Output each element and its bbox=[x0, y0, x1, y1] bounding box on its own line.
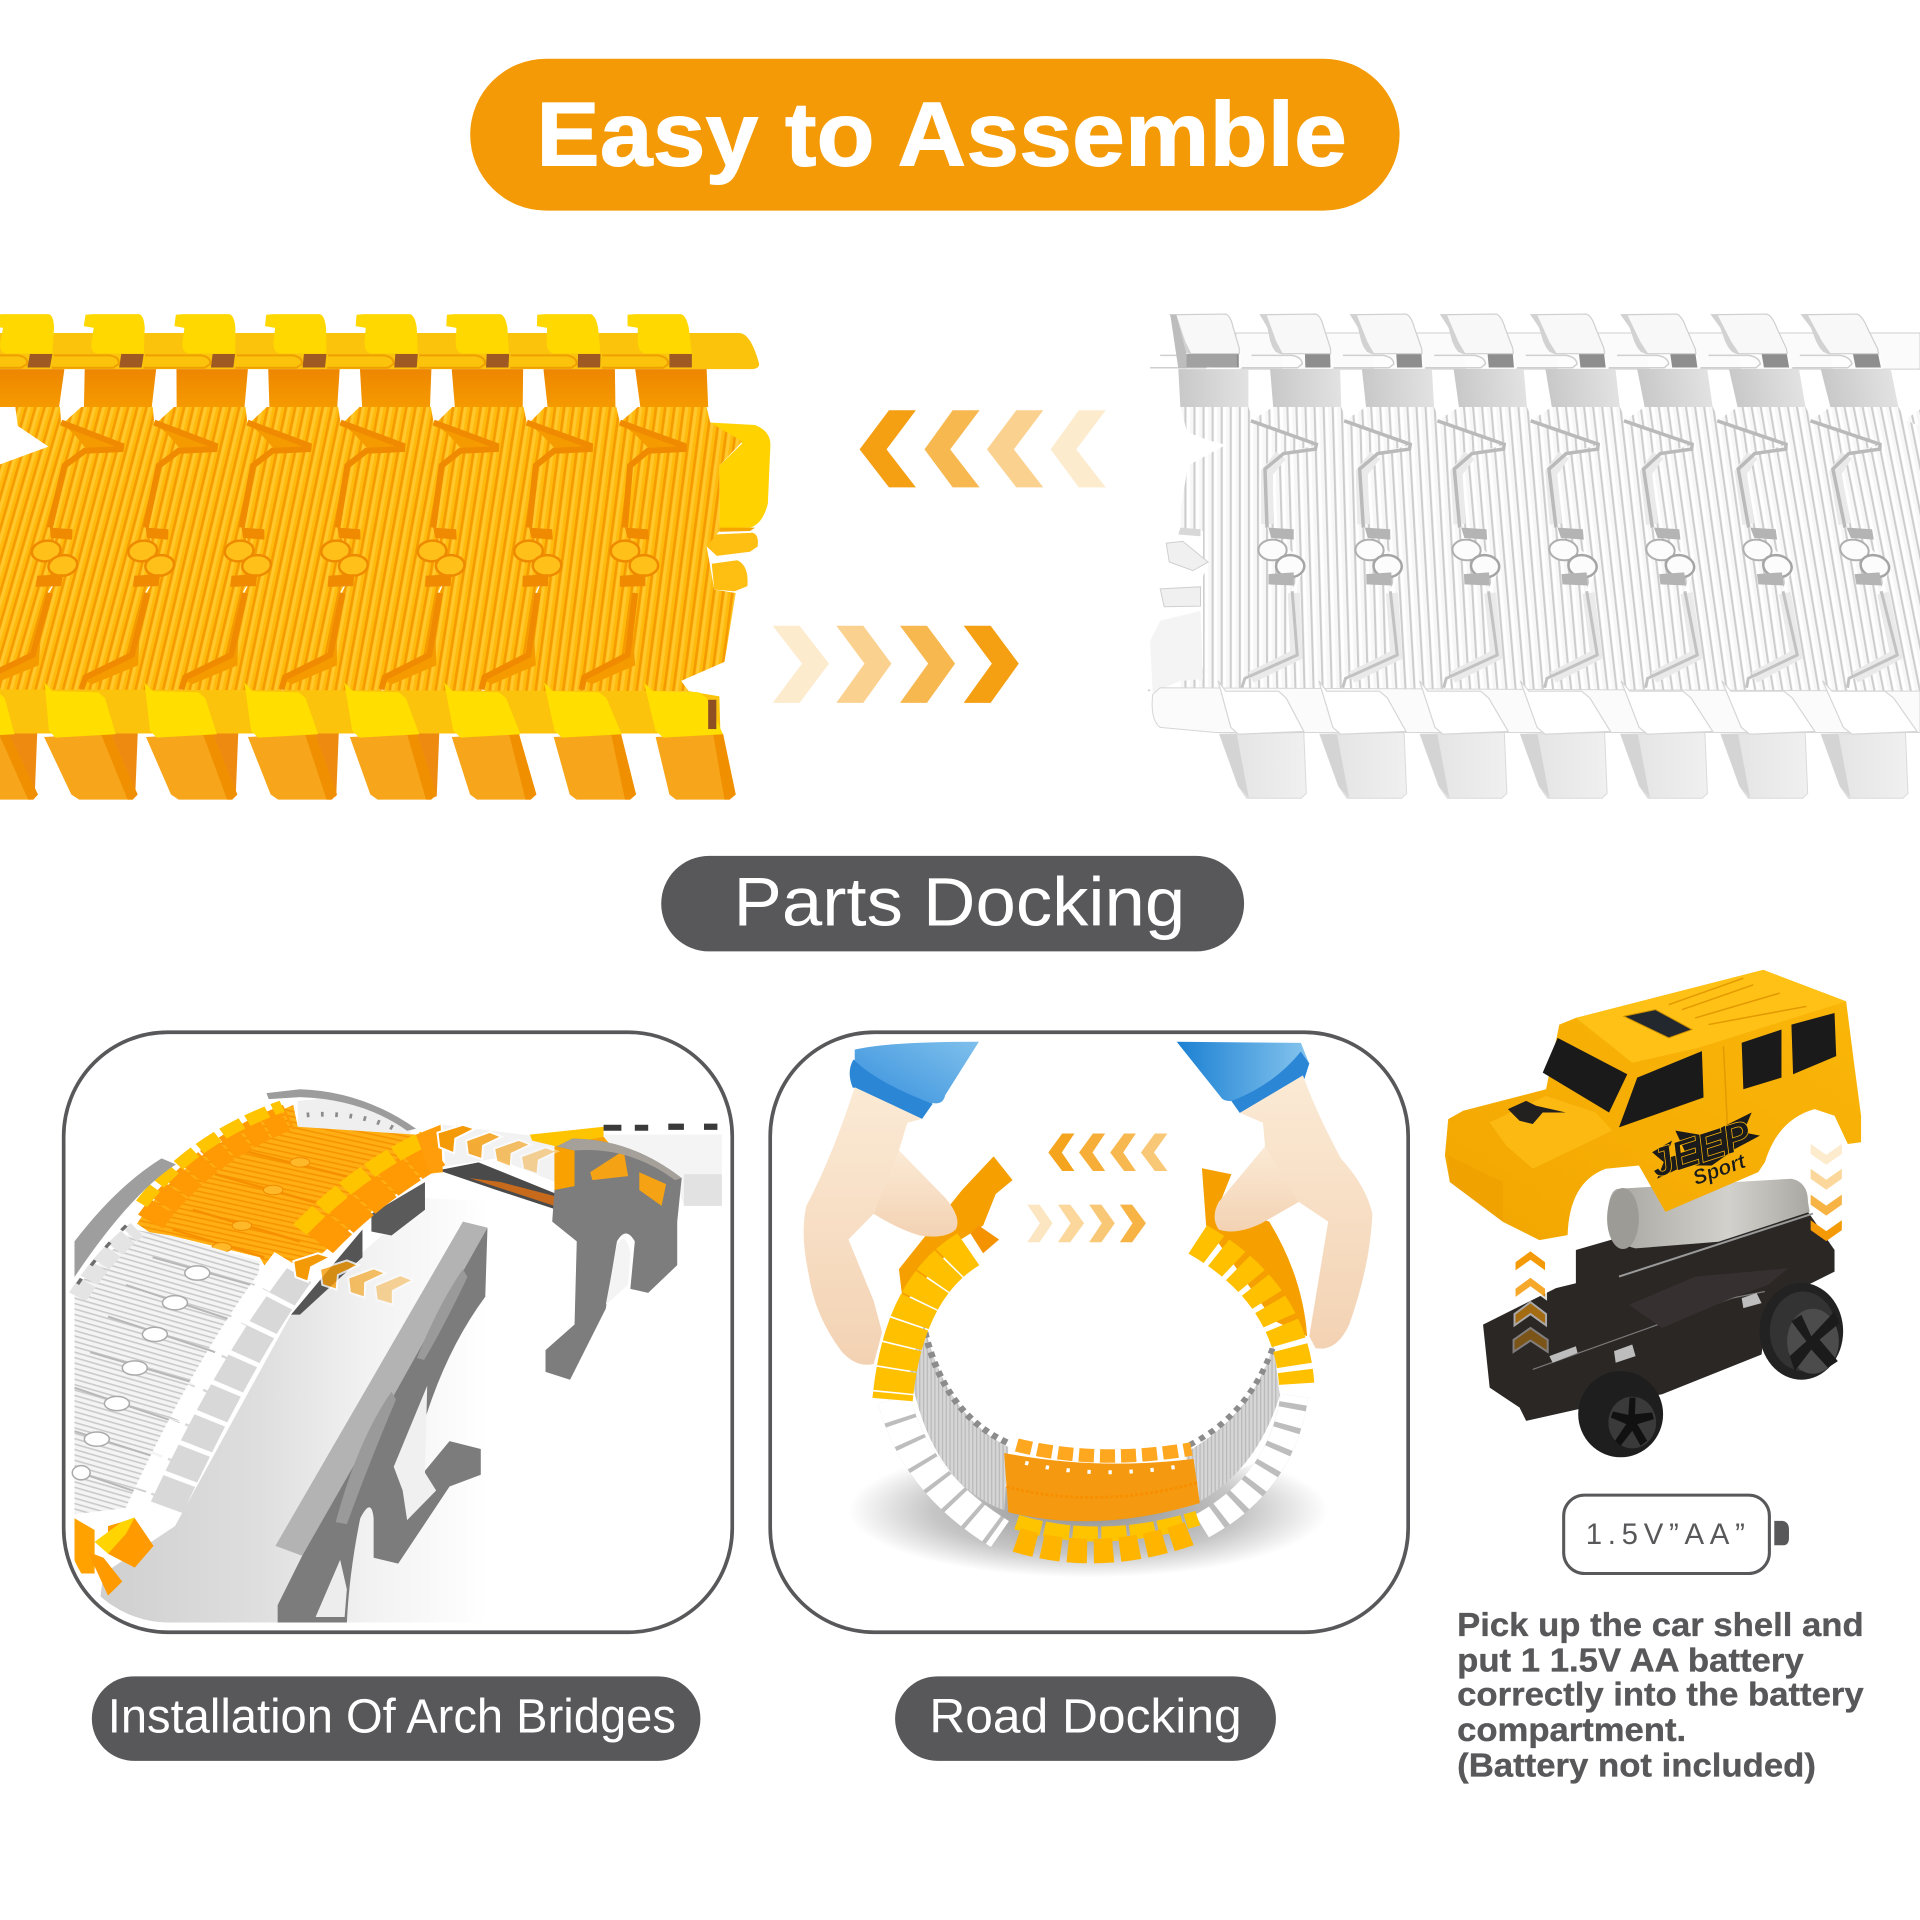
panel: arch bridge installation bbox=[64, 1032, 750, 1640]
right hand bbox=[1215, 1075, 1372, 1349]
front arch bridge bbox=[275, 1222, 487, 1623]
upper chevrons bbox=[1048, 1133, 1167, 1171]
battery instructions: Pick up the car shell and bbox=[1457, 1607, 1864, 1644]
orange bottom band bbox=[1004, 1445, 1200, 1551]
label: Parts Docking bbox=[661, 856, 1244, 951]
roof decal bbox=[1624, 1010, 1692, 1038]
white ribbed tiles bbox=[72, 1218, 260, 1514]
car side lettering: JEEP bbox=[1644, 1111, 1757, 1187]
white bottom rail bbox=[1152, 681, 1920, 734]
title pill: Easy to Assemble bbox=[536, 84, 1347, 185]
sleeves bbox=[850, 1042, 1309, 1119]
dark span underside bbox=[438, 1162, 557, 1209]
upper chevrons bbox=[437, 1125, 558, 1174]
arrows: right-pointing chevrons bbox=[773, 626, 1019, 703]
label: Installation Of Arch Bridges: Installation Of Arch Bridges bbox=[108, 1691, 676, 1744]
left grey arch bbox=[75, 1158, 176, 1277]
white teeth underlay bbox=[894, 1396, 1295, 1534]
orange bottom-left blocks bbox=[75, 1517, 154, 1596]
far white track bbox=[604, 1124, 722, 1206]
white track piece bbox=[1120, 314, 1920, 798]
ring and hands scene bbox=[804, 1042, 1372, 1577]
orange seams bbox=[0, 423, 684, 689]
floor bbox=[100, 1218, 414, 1622]
orange track piece bbox=[0, 314, 770, 800]
battery icon bbox=[1564, 1495, 1789, 1573]
battery instructions: compartment. bbox=[1457, 1712, 1686, 1749]
ring shadow bbox=[860, 1465, 1316, 1574]
battery instructions: put 1 1.5V AA battery bbox=[1457, 1642, 1804, 1679]
lower chevrons bbox=[293, 1253, 413, 1305]
bridge scene bbox=[72, 1089, 750, 1640]
white outer wall blocks bbox=[135, 1257, 296, 1512]
lower chevrons bbox=[1027, 1205, 1146, 1242]
car shell bbox=[1445, 970, 1861, 1240]
white top rail bbox=[1150, 314, 1920, 407]
back support posts bbox=[371, 1182, 425, 1235]
thumbs over the ribbon bbox=[874, 1147, 1299, 1237]
orange bottom rail bbox=[0, 683, 723, 738]
white ribbed deck bbox=[1120, 404, 1920, 693]
front wheel bbox=[1578, 1371, 1663, 1457]
down chevrons bbox=[1811, 1144, 1842, 1241]
orange ribbed deck bbox=[0, 369, 770, 691]
title pill bbox=[470, 59, 1400, 211]
panel: hands road docking bbox=[770, 1032, 1408, 1632]
car side lettering: Sport bbox=[1690, 1149, 1750, 1190]
left hand bbox=[804, 1087, 957, 1365]
grey ribbed band bbox=[909, 1324, 1280, 1510]
label: Road Docking bbox=[895, 1676, 1276, 1761]
battery instructions bbox=[1457, 1607, 1864, 1785]
white upper-span track bbox=[443, 1125, 557, 1182]
arrows: left-pointing chevrons bbox=[860, 410, 1106, 487]
orange feet bbox=[0, 732, 736, 800]
hood decal bbox=[1508, 1101, 1566, 1124]
battery icon: 1.5V”AA” bbox=[1586, 1518, 1745, 1551]
car assembly illustration bbox=[1445, 970, 1861, 1457]
rear wheel bbox=[1760, 1283, 1843, 1380]
up chevrons bbox=[1514, 1250, 1548, 1352]
right orange ribbon bbox=[1198, 1168, 1307, 1384]
label: Parts Docking: Parts Docking bbox=[733, 864, 1185, 941]
car windows bbox=[1543, 1013, 1836, 1127]
orange top rail bbox=[0, 314, 759, 407]
orange deck bbox=[137, 1105, 443, 1265]
white feet bbox=[1220, 732, 1920, 798]
battery instructions: correctly into the battery bbox=[1457, 1677, 1864, 1714]
left orange ribbon bbox=[893, 1156, 1013, 1400]
white seams bbox=[1242, 421, 1920, 688]
battery instructions: (Battery not included) bbox=[1457, 1748, 1816, 1785]
battery bbox=[1607, 1179, 1810, 1249]
door decal splash bbox=[1652, 1112, 1760, 1179]
label: Installation Of Arch Bridges bbox=[92, 1676, 700, 1761]
label: Road Docking: Road Docking bbox=[929, 1691, 1242, 1744]
rear white wall bbox=[298, 1099, 412, 1134]
car chassis bbox=[1483, 1212, 1835, 1421]
far arch bridge bbox=[546, 1139, 682, 1380]
